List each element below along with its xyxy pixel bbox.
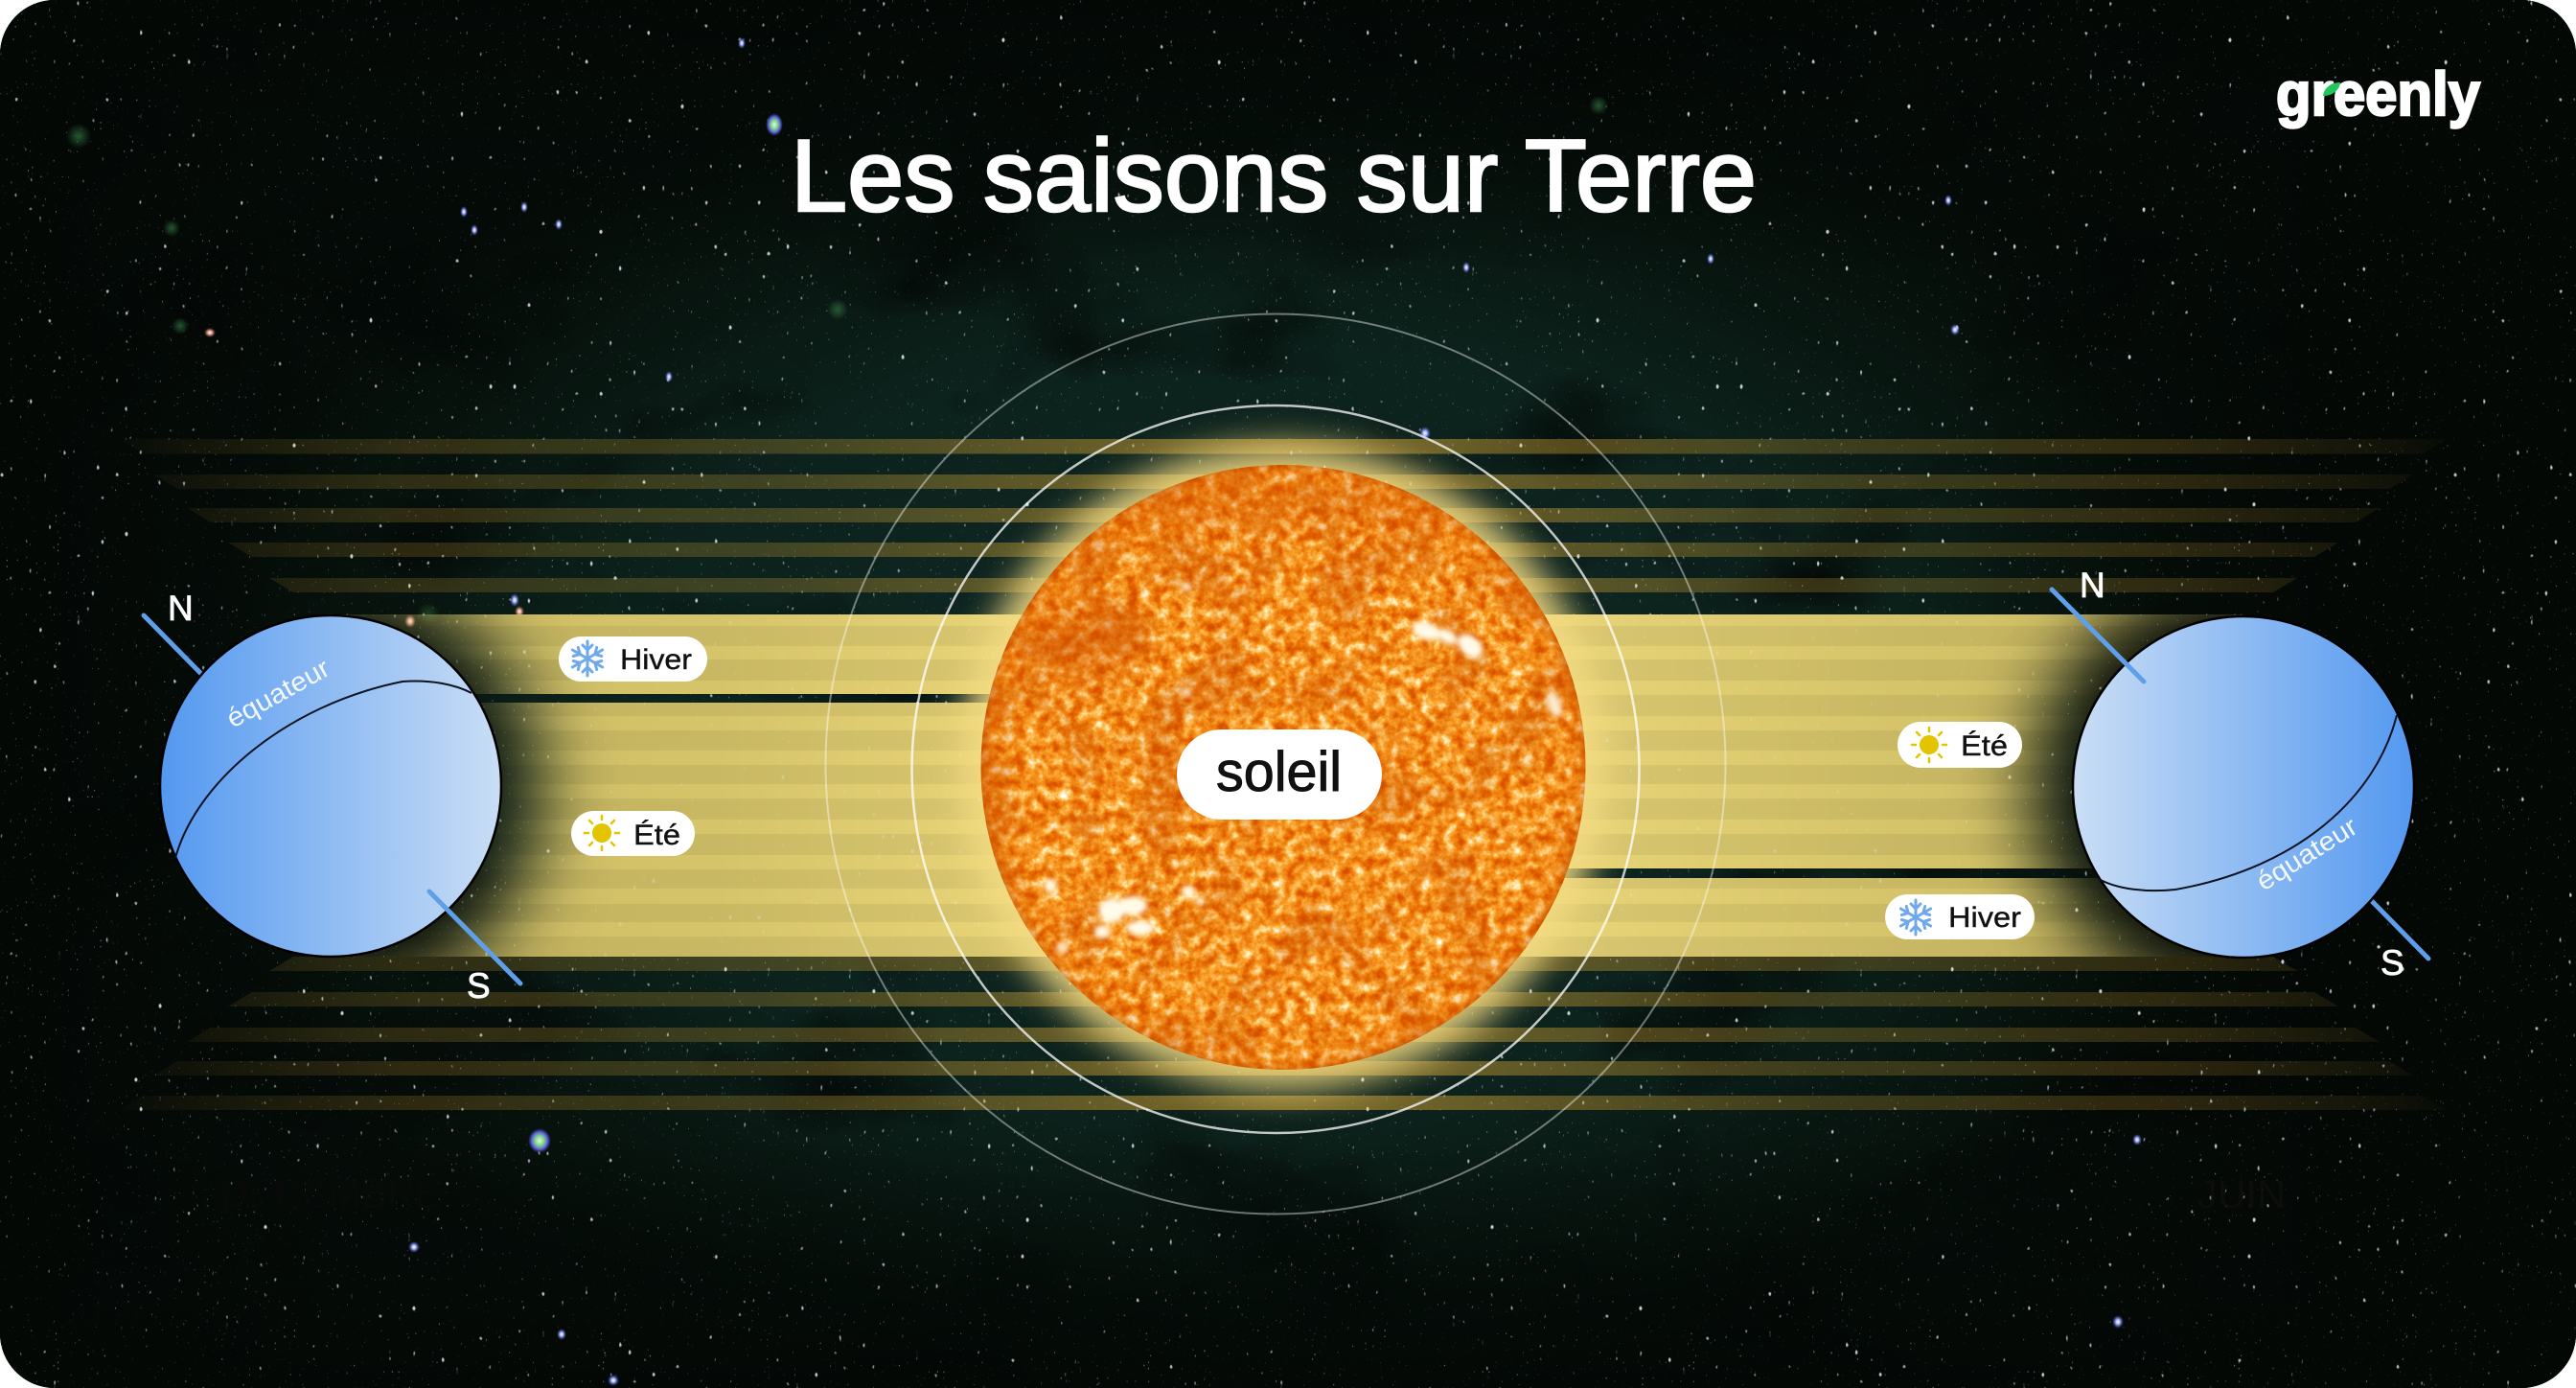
left earth: december	[144, 589, 520, 1006]
pill: été right: Été	[1961, 730, 2008, 762]
stars over the light	[383, 403, 2185, 1074]
faint month label: décembre: DÉCEMBRE	[220, 1170, 441, 1217]
equator line left	[175, 682, 472, 858]
equator label right: équateur	[2251, 811, 2362, 896]
logo: greenly: greenly	[2276, 59, 2480, 128]
south label right: S	[2380, 943, 2404, 983]
sun glow	[961, 445, 1605, 1089]
faint month label: juin: JUIN	[2197, 1171, 2286, 1216]
right earth: june	[2052, 566, 2428, 983]
sun	[978, 460, 1591, 1074]
icon: snowflake	[1900, 900, 1931, 935]
globe right	[2073, 616, 2414, 958]
icon: snowflake	[572, 641, 603, 676]
pill: hiver right: Hiver	[1948, 902, 2021, 934]
pill: hiver right	[1885, 894, 2035, 939]
main sunlight band	[331, 614, 2243, 957]
south axis left	[429, 891, 520, 983]
title: Les saisons sur Terre	[791, 118, 1757, 233]
north label left: N	[168, 589, 194, 628]
pill: été left	[571, 811, 695, 856]
orbit rings	[826, 314, 1725, 1214]
soleil pill: soleil	[1216, 741, 1342, 803]
north axis right	[2052, 590, 2144, 682]
icon: sun	[1912, 728, 1946, 762]
soleil pill	[1177, 729, 1382, 820]
pill: été left: Été	[633, 820, 680, 851]
icon: leaf	[2323, 82, 2340, 96]
north axis left	[144, 615, 203, 676]
pill: hiver left: Hiver	[620, 644, 692, 676]
globe left	[160, 615, 501, 957]
pill: été right	[1898, 722, 2022, 768]
south label left: S	[467, 966, 491, 1006]
equator line right	[2099, 715, 2397, 891]
light rays: faint bars above and below	[120, 439, 2447, 1110]
north label right: N	[2080, 566, 2105, 605]
south axis right	[2367, 896, 2428, 959]
equator label left: équateur	[221, 653, 334, 733]
pill: hiver left	[559, 636, 707, 682]
icon: sun	[585, 816, 619, 850]
